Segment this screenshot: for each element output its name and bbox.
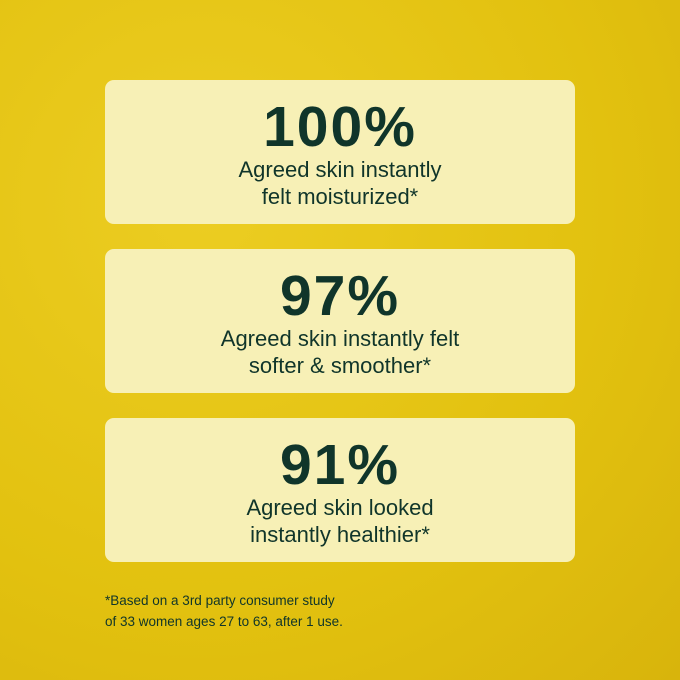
text: moisturized: felt moisturized* xyxy=(262,184,418,209)
stat: 91%: 91% xyxy=(280,433,400,497)
text: softer: softer & smoother* xyxy=(249,353,431,378)
footnote: *Based on a 3rd party consumer study xyxy=(105,593,335,608)
footnote: of 33 women ages 27 to 63, after 1 use. xyxy=(105,614,343,629)
stat: 97%: 97% xyxy=(280,264,400,328)
text: healthier: instantly healthier* xyxy=(250,522,430,547)
text: softer: Agreed skin instantly felt xyxy=(221,326,459,351)
card: 100% xyxy=(105,80,575,224)
text: healthier xyxy=(246,495,434,547)
text: healthier: Agreed skin looked xyxy=(246,495,434,520)
text: moisturized xyxy=(238,157,442,209)
card: 97% xyxy=(105,249,575,393)
text: softer xyxy=(220,326,460,378)
card: 91% xyxy=(105,418,575,562)
footnote xyxy=(105,593,343,629)
text: moisturized: Agreed skin instantly xyxy=(238,157,442,182)
stat: 100%: 100% xyxy=(263,95,417,159)
